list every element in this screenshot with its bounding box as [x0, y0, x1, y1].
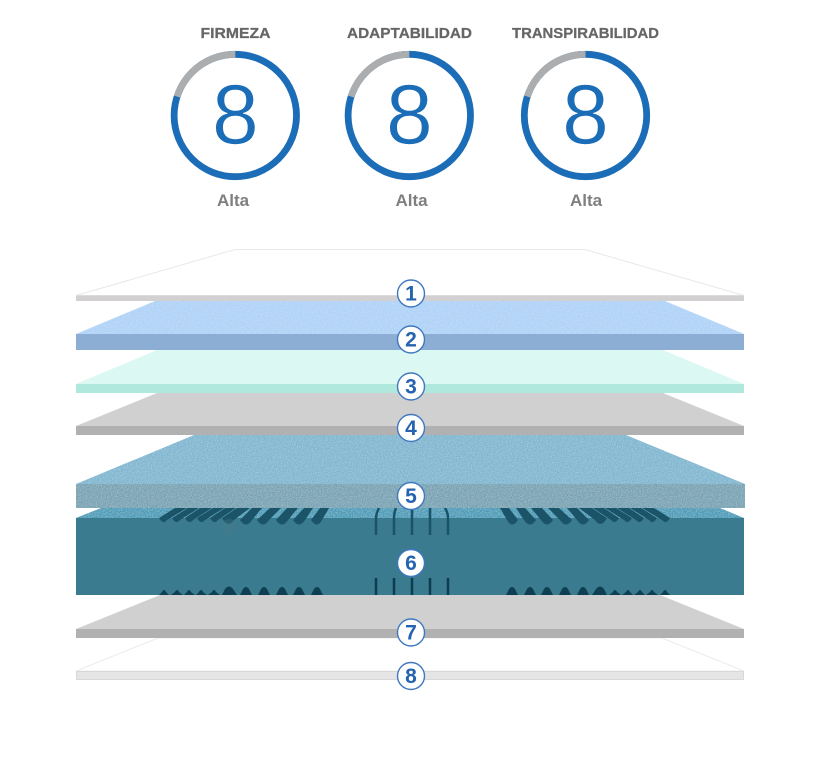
- score: transpirabilidad: 8: [562, 68, 609, 162]
- badge 1: 1: [405, 282, 417, 306]
- gauge: firmeza: [174, 26, 296, 210]
- heading: transpirabilidad: TRANSPIRABILIDAD: [512, 26, 659, 42]
- heading: firmeza: FIRMEZA: [200, 26, 271, 42]
- rating: adaptabilidad: Alta: [395, 191, 428, 210]
- badge 8: [398, 662, 424, 690]
- layer 6: pocket spring core: [76, 508, 744, 595]
- springs top left: [159, 508, 329, 524]
- heading: adaptabilidad: ADAPTABILIDAD: [347, 26, 472, 42]
- gauge: transpirabilidad: [512, 26, 659, 210]
- badge 5: [398, 482, 424, 510]
- gauge: adaptabilidad: [347, 26, 472, 210]
- layer 5: textured foam: [76, 435, 745, 508]
- badge 2: [398, 326, 424, 353]
- springs bottom left: [159, 586, 323, 595]
- badge 1: [398, 280, 424, 307]
- springs top right: [500, 508, 670, 524]
- layer 8: thin bottom cover: [76, 638, 744, 680]
- score: adaptabilidad: 8: [386, 68, 433, 162]
- layer 7: grey sheet: [76, 595, 744, 638]
- badge 3: 3: [405, 376, 417, 398]
- spring shadow: [221, 519, 237, 535]
- layer 3: mint foam: [76, 350, 744, 393]
- springs centre bottom: [376, 578, 448, 595]
- badge 8: 8: [405, 665, 417, 688]
- gauge ring: transpirabilidad: [524, 54, 647, 177]
- badge 5: 5: [405, 485, 417, 508]
- badge 2: 2: [405, 328, 417, 352]
- layer 2: blue foam: [76, 301, 744, 350]
- rating: firmeza: Alta: [217, 191, 250, 210]
- badge 7: [398, 619, 424, 646]
- badge 7: 7: [405, 622, 417, 644]
- springs bottom right: [506, 586, 670, 595]
- score: firmeza: 8: [212, 68, 259, 162]
- gauge ring: firmeza: [174, 54, 296, 177]
- badge 4: 4: [405, 417, 417, 440]
- badge 3: [398, 373, 424, 400]
- gauge ring: adaptabilidad: [348, 54, 470, 177]
- badge 6: 6: [405, 552, 417, 575]
- layer 1: thin top cover: [76, 250, 744, 301]
- layer 4: grey sheet: [76, 393, 744, 435]
- badge 4: [398, 414, 424, 442]
- badge 6: [398, 550, 424, 576]
- rating: transpirabilidad: Alta: [570, 191, 603, 210]
- springs centre top: [376, 508, 448, 535]
